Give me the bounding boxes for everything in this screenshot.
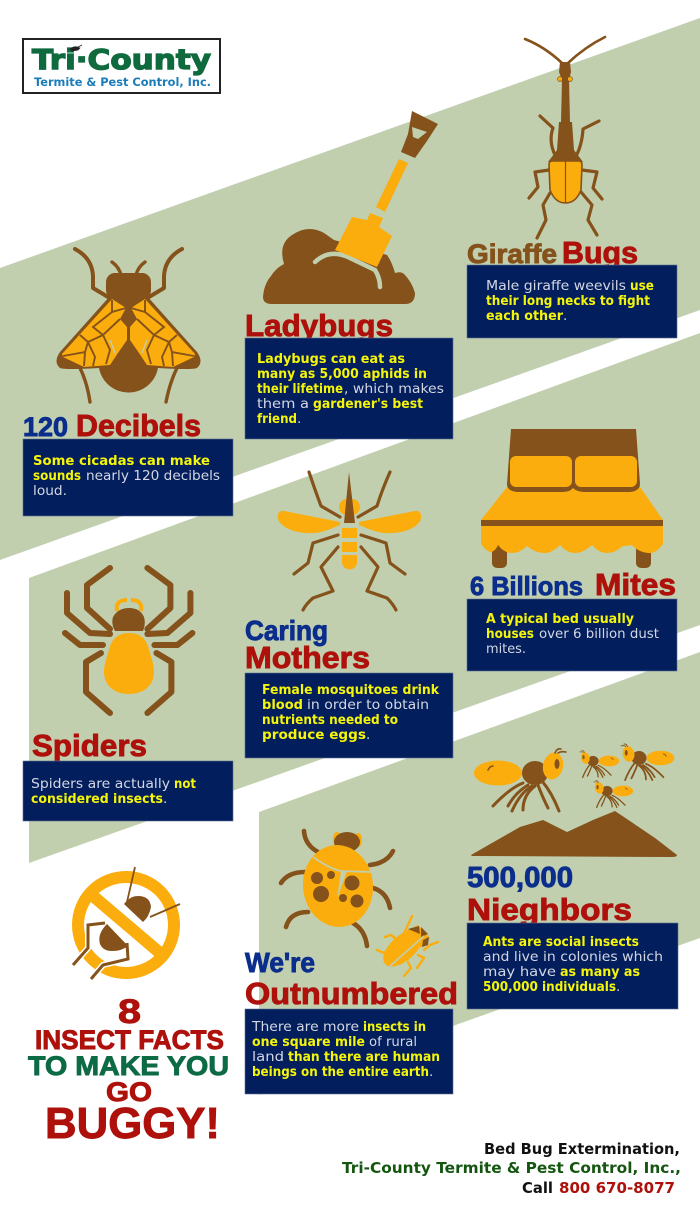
panel: cicada 120 decibels [23, 249, 233, 516]
text card: cicadas: loud. [33, 483, 67, 499]
heading: Caring Mothers: Mothers [245, 640, 370, 675]
heading: 500,000 Nieghbors: 500,000 [467, 862, 573, 894]
text card: cicadas: Some cicadas can make [33, 453, 210, 469]
icon: bed [481, 429, 663, 568]
heading: Caring Mothers: Caring [245, 615, 328, 646]
text card: dust mites [467, 599, 677, 671]
text card: ladybugs: friend [257, 411, 297, 427]
text card: mosquitoes: produce eggs [262, 727, 366, 743]
title: 8 insect facts to make you go buggy: BUGGY! [45, 1099, 220, 1148]
text card: outnumbered: . [429, 1064, 433, 1080]
text card: spiders [23, 761, 233, 821]
heading: Giraffe Bugs: Giraffe [467, 239, 557, 269]
icon: cicada [56, 249, 200, 402]
text card: ants: and live in colonies which [483, 949, 663, 965]
icon: large beetle [281, 831, 393, 946]
panel: mites [467, 429, 677, 671]
icon: no bugs sign [73, 867, 180, 979]
title: 8 insect facts to make you go buggy: INSECT FACTS [35, 1025, 224, 1055]
text card: ladybugs: Ladybugs can eat as [257, 351, 405, 367]
footer: call to action: Call [522, 1179, 553, 1197]
text card: ants: Ants are social insects [483, 934, 639, 950]
footer: call to action: Tri-County Termite & Pest Control, Inc., [342, 1159, 681, 1177]
text card: giraffe weevils: Male giraffe weevils [486, 278, 626, 294]
heading: We're Outnumbered [245, 947, 458, 1011]
icon: spider [65, 568, 192, 713]
heading: 6 Billions Mites: Mites [595, 567, 676, 602]
footer: call to action: 800 670-8077 [559, 1179, 675, 1197]
heading: We're Outnumbered: We're [245, 947, 315, 978]
icon: giraffe weevil [525, 37, 605, 238]
panel: spiders [23, 568, 233, 821]
text card: outnumbered: than there are human [288, 1049, 440, 1065]
title: 8 insect facts to make you go buggy: 8 [118, 993, 141, 1031]
text card: giraffe weevils: . [563, 308, 567, 324]
title: 8 insect facts to make you go buggy: TO MAKE YOU [28, 1051, 229, 1081]
heading: We're Outnumbered: Outnumbered [245, 976, 458, 1011]
text card: ladybugs: their lifetime [257, 381, 343, 397]
icon: ants over ant hill [471, 744, 677, 857]
heading: Giraffe Bugs [467, 235, 638, 270]
text card: spiders: considered insects [31, 791, 163, 807]
heading: 6 Billions Mites [470, 567, 676, 602]
text card: ants: as many as [560, 964, 640, 980]
text card: outnumbered: of rural [369, 1034, 417, 1050]
text card: ants [467, 923, 678, 1009]
text card: spiders: Spiders are actually [31, 776, 170, 792]
text card: dust mites: over 6 billion dust [539, 626, 659, 642]
heading: 500,000 Nieghbors: Nieghbors [467, 892, 632, 927]
text card: mosquitoes: in order to obtain [307, 697, 429, 713]
icon: small beetle [377, 916, 438, 976]
heading: 500,000 Nieghbors [467, 862, 632, 927]
text card: mosquitoes: . [366, 727, 370, 743]
footer: call to action [342, 1140, 681, 1197]
text card: giraffe weevils: use [630, 278, 654, 294]
panel: 500,000 neighbors [467, 744, 678, 1009]
heading: Caring Mothers [245, 615, 370, 675]
text card: mosquitoes [245, 673, 453, 758]
heading: 120 Decibels: 120 [23, 412, 68, 442]
text card: ladybugs: , which makes [344, 381, 444, 397]
logo: Tri-County [23, 39, 220, 93]
text card: cicadas: sounds [33, 468, 81, 484]
text card: mosquitoes: Female mosquitoes drink [262, 682, 440, 698]
text card: outnumbered: beings on the entire earth [252, 1064, 429, 1080]
heading: Giraffe Bugs: Bugs [562, 235, 638, 270]
logo: Tri-County: Tri·County [32, 43, 211, 76]
text card: cicadas [23, 439, 233, 516]
text card: spiders: . [163, 791, 167, 807]
text card: ladybugs [245, 338, 453, 439]
text card: outnumbered: insects in [363, 1019, 426, 1035]
text card: spiders: not [174, 776, 196, 792]
text card: ladybugs: them a [257, 396, 309, 412]
heading: 6 Billions Mites: 6 Billions [470, 571, 583, 601]
text card: outnumbered [245, 1009, 453, 1094]
text card: dust mites: mites. [486, 641, 526, 657]
text card: giraffe weevils: each other [486, 308, 563, 324]
text card: ladybugs: gardener's best [313, 396, 423, 412]
text card: dust mites: A typical bed usually [486, 611, 634, 627]
title: 8 insect facts to make you go buggy: GO [106, 1077, 152, 1107]
text card: giraffe weevils: their long necks to fight [486, 293, 650, 309]
text card: outnumbered: There are more [251, 1019, 359, 1035]
text card: outnumbered: one square mile [252, 1034, 365, 1050]
heading: 120 Decibels: Decibels [76, 408, 201, 443]
text card: giraffe weevils [467, 265, 677, 338]
panel: we're outnumbered [245, 831, 458, 1094]
text card: dust mites: houses [486, 626, 534, 642]
title: 8 insect facts to make you go buggy [28, 993, 229, 1148]
text card: ladybugs: . [297, 411, 301, 427]
panel: ladybugs [245, 111, 453, 439]
text card: ants: 500,000 individuals [483, 979, 616, 995]
heading: Spiders: Spiders [32, 728, 147, 763]
heading: Ladybugs: Ladybugs [245, 308, 393, 343]
logo: Tri-County: Termite & Pest Control, Inc. [34, 75, 211, 89]
text card: mosquitoes: blood [262, 697, 303, 713]
icon: mosquito [278, 472, 421, 610]
text card: ants: . [616, 979, 620, 995]
heading: 120 Decibels [23, 408, 201, 443]
footer: call to action: Bed Bug Extermination, [484, 1140, 680, 1158]
text card: ladybugs: many as 5,000 aphids in [257, 366, 427, 382]
panel: giraffe bugs [467, 37, 677, 338]
text card: mosquitoes: nutrients needed to [262, 712, 398, 728]
text card: ants: may have [483, 964, 556, 980]
panel: caring mothers [245, 472, 453, 758]
text card: cicadas: nearly 120 decibels [86, 468, 220, 484]
icon: shovel in soil [263, 111, 438, 304]
text card: outnumbered: land [252, 1049, 284, 1065]
